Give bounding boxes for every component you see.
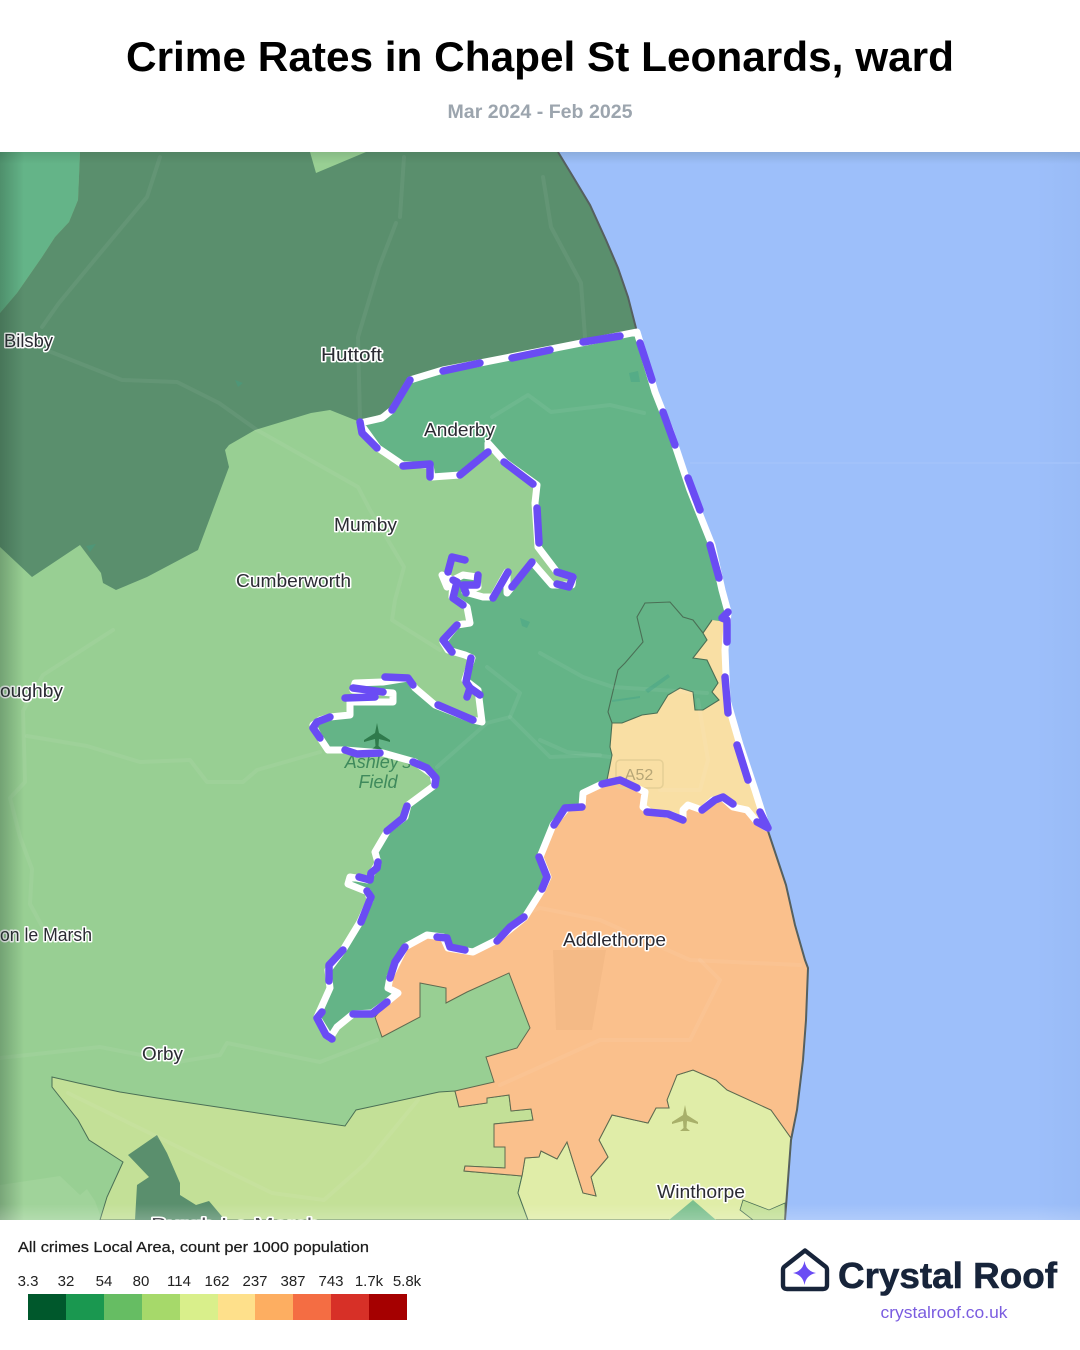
legend scale labels: 54 bbox=[96, 1273, 112, 1290]
legend scale labels bbox=[18, 1273, 422, 1290]
icon: A52 road shield bbox=[616, 760, 663, 788]
legend bbox=[18, 1239, 422, 1320]
legend scale labels: 743 bbox=[318, 1273, 344, 1290]
icon: A52 road shield: A52 bbox=[625, 767, 653, 784]
place labels: Burgh Le Marsh bbox=[151, 1215, 320, 1235]
area: peach Addlethorpe bbox=[375, 780, 808, 1196]
ward boundary: white outline bbox=[313, 332, 767, 1038]
legend colour ramp bbox=[28, 1294, 407, 1320]
area: yellow-green lower right patch bbox=[740, 1200, 785, 1220]
thin internal boundary bbox=[608, 602, 703, 723]
legend scale labels: 162 bbox=[204, 1273, 230, 1290]
area: cream central ward strip bbox=[607, 620, 767, 828]
place labels: Orby bbox=[142, 1044, 183, 1064]
place labels: Addlethorpe bbox=[563, 930, 666, 950]
area: yellow-green south bbox=[52, 1077, 533, 1220]
legend scale labels: 387 bbox=[280, 1273, 306, 1290]
legend scale labels: 3.3 bbox=[18, 1273, 38, 1290]
subtitle: date range: Mar 2024 - Feb 2025 bbox=[448, 102, 633, 123]
website link: crystalroof.co.uk bbox=[880, 1304, 1008, 1322]
place labels: Cumberworth bbox=[236, 571, 351, 591]
legend scale labels: 1.7k bbox=[355, 1273, 384, 1290]
water patches bbox=[86, 371, 670, 702]
area: south-west lighter green bbox=[0, 1176, 102, 1220]
legend scale labels: 114 bbox=[167, 1273, 191, 1290]
area: ward Chapel St Leonards fill bbox=[318, 336, 724, 1032]
logo: Crystal Roof bbox=[783, 1250, 1058, 1322]
roads bbox=[25, 157, 708, 1140]
coast line bbox=[558, 152, 637, 332]
map edge shading bbox=[0, 152, 1080, 1220]
land base: light green area bbox=[0, 152, 808, 1220]
icon: Ashley's Field airfield bbox=[364, 723, 390, 749]
place labels: Anderby bbox=[424, 420, 495, 440]
area: dark green north bbox=[0, 152, 637, 590]
legend scale labels: 237 bbox=[242, 1273, 268, 1290]
legend title: All crimes Local Area, count per 1000 population bbox=[18, 1239, 369, 1256]
place labels: Bilsby bbox=[4, 331, 53, 351]
built-up patch bbox=[553, 950, 606, 1030]
area: top patch bbox=[250, 152, 305, 160]
wordmark: Crystal Roof bbox=[838, 1255, 1058, 1296]
place labels: oughby bbox=[0, 681, 63, 701]
title: Crime Rates in Chapel St Leonards, ward bbox=[126, 33, 954, 80]
area: top light green patch bbox=[310, 152, 366, 173]
label: Ashley's Field bbox=[344, 756, 410, 788]
place labels: Winthorpe bbox=[657, 1182, 745, 1202]
area: pale yellow-green Winthorpe bbox=[518, 1070, 791, 1220]
area: north-west mid green bbox=[0, 152, 80, 313]
icon: house with star bbox=[783, 1250, 827, 1289]
place labels bbox=[0, 331, 745, 1235]
coast line south bbox=[767, 828, 808, 1220]
cream edge outline bbox=[607, 620, 719, 780]
place labels: on le Marsh bbox=[0, 925, 92, 945]
place labels: Mumby bbox=[334, 515, 397, 535]
area: dark green Burgh patch bbox=[128, 1135, 225, 1220]
legend scale labels: 5.8k bbox=[393, 1273, 422, 1290]
sea bbox=[559, 152, 1080, 1220]
area: green patches at lower edge bbox=[669, 1200, 716, 1220]
label: Ashley's Field: Ashley's bbox=[344, 752, 411, 772]
label: Ashley's Field: Field bbox=[358, 772, 398, 792]
legend scale labels: 32 bbox=[58, 1273, 74, 1290]
legend scale labels: 80 bbox=[133, 1273, 149, 1290]
icon: Winthorpe airfield bbox=[672, 1105, 698, 1131]
place labels: Huttoft bbox=[321, 345, 382, 365]
ward boundary: purple dashes bbox=[313, 336, 768, 1039]
